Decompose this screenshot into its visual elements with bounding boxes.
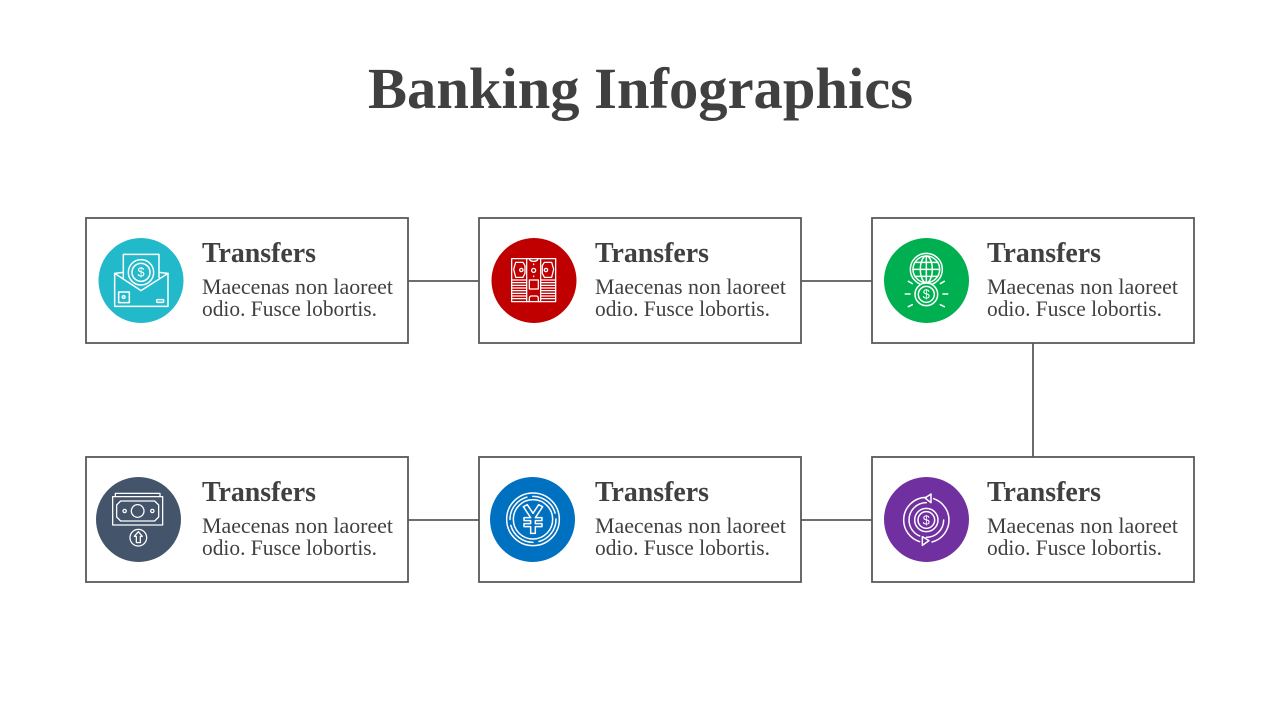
card heading: Transfers (202, 477, 316, 508)
card text: Maecenas non laoreet (202, 513, 394, 538)
card heading: Transfers (987, 477, 1101, 508)
icon: teal envelope with money: $ (137, 266, 145, 280)
card text: Maecenas non laoreet (202, 274, 394, 299)
card text: odio. Fusce lobortis. (202, 535, 377, 560)
connector: card 4 to card 5 (408, 519, 479, 521)
card text: odio. Fusce lobortis. (595, 535, 770, 560)
card text (595, 513, 787, 560)
card text (987, 513, 1179, 560)
card text (202, 513, 394, 560)
panel: card 6 (872, 457, 1194, 582)
title: Banking Infographics (368, 56, 913, 121)
icon: purple circular money flow: $ (923, 513, 930, 527)
connector: card 3 to card 6 (1032, 343, 1034, 457)
icon: purple circular money flow (884, 477, 969, 562)
card heading: Transfers (595, 238, 709, 269)
panel: card 4 (86, 457, 408, 582)
card text: Maecenas non laoreet (987, 513, 1179, 538)
card text: odio. Fusce lobortis. (987, 296, 1162, 321)
connector: card 2 to card 3 (801, 280, 872, 282)
card text (202, 274, 394, 321)
panel: card 1 (86, 218, 408, 343)
card text: odio. Fusce lobortis. (202, 296, 377, 321)
icon: red banknote stacks (492, 238, 576, 323)
panel: card 2 (479, 218, 801, 343)
panel: card 3 (872, 218, 1194, 343)
card text (987, 274, 1179, 321)
icon: teal envelope with money (98, 238, 184, 323)
card text: Maecenas non laoreet (987, 274, 1179, 299)
connector: card 5 to card 6 (801, 519, 872, 521)
icon: green globe and coin (884, 238, 969, 323)
card heading: Transfers (202, 238, 316, 269)
icon: slate banknote with up arrow (96, 477, 181, 562)
icon: green globe and coin: $ (923, 288, 930, 302)
card text: Maecenas non laoreet (595, 274, 787, 299)
card text: odio. Fusce lobortis. (987, 535, 1162, 560)
panel: card 5 (479, 457, 801, 582)
card heading: Transfers (987, 238, 1101, 269)
card heading: Transfers (595, 477, 709, 508)
card text (595, 274, 787, 321)
card text: Maecenas non laoreet (595, 513, 787, 538)
icon: blue yen coin (490, 477, 575, 562)
connector: card 1 to card 2 (408, 280, 479, 282)
card text: odio. Fusce lobortis. (595, 296, 770, 321)
